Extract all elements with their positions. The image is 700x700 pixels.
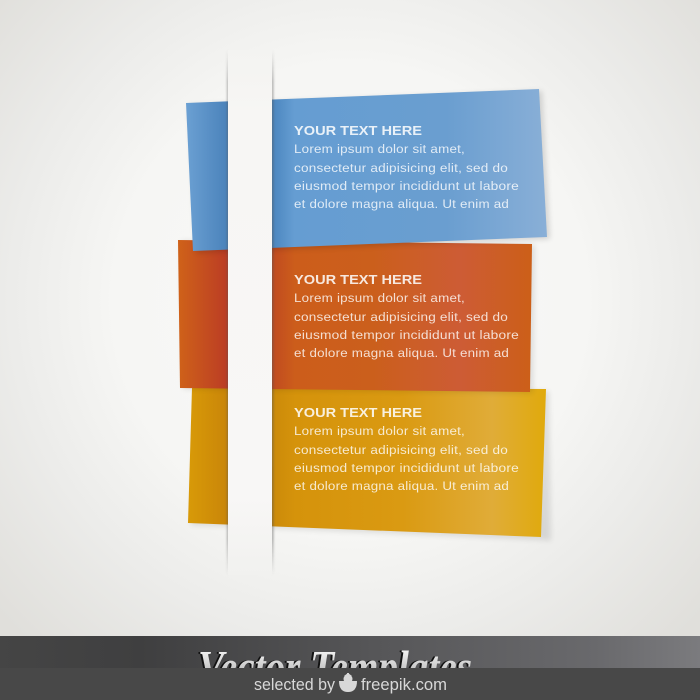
attribution: selected by freepik.com [254,673,447,694]
attribution: selected by freepik.com: selected by [254,676,336,694]
clipped title: Vector Templates [198,650,471,668]
panel: yellow banner [188,388,551,541]
text block: orange: YOUR TEXT HERE [294,272,423,287]
text block: yellow: Lorem ipsum dolor sit amet, [294,424,465,438]
panel: orange banner [178,240,535,393]
text block: blue: consectetur adipisicing elit, sed do [294,161,508,175]
attribution: selected by freepik.com: freepik.com [361,676,447,694]
text block: blue: et dolore magna aliqua. Ut enim ad [294,197,509,211]
icon: freepik logo [339,673,357,692]
vertical white strip [227,50,274,575]
text block: yellow: YOUR TEXT HERE [294,405,423,420]
text block: orange: eiusmod tempor incididunt ut labore [294,328,519,342]
attribution bar [0,668,700,700]
text block: blue: eiusmod tempor incididunt ut labore [294,179,519,193]
text block: orange: et dolore magna aliqua. Ut enim ad [294,346,509,360]
panel: blue banner [186,89,550,253]
text block: blue: YOUR TEXT HERE [294,123,423,138]
text block: yellow [294,405,519,493]
text block: orange [294,272,519,360]
clipped title: Vector Templates: Vector Templates [196,641,470,692]
text block: orange: Lorem ipsum dolor sit amet, [294,291,465,305]
clipped title: Vector Templates: Vector Templates [198,641,472,692]
text block: orange: consectetur adipisicing elit, sed do [294,310,508,324]
footer band [0,636,700,668]
text block: blue: Lorem ipsum dolor sit amet, [294,142,465,156]
text block: yellow: et dolore magna aliqua. Ut enim ad [294,479,509,493]
text block: yellow: consectetur adipisicing elit, sed do [294,443,508,457]
text block: yellow: eiusmod tempor incididunt ut labore [294,461,519,475]
text block: blue [294,123,519,211]
